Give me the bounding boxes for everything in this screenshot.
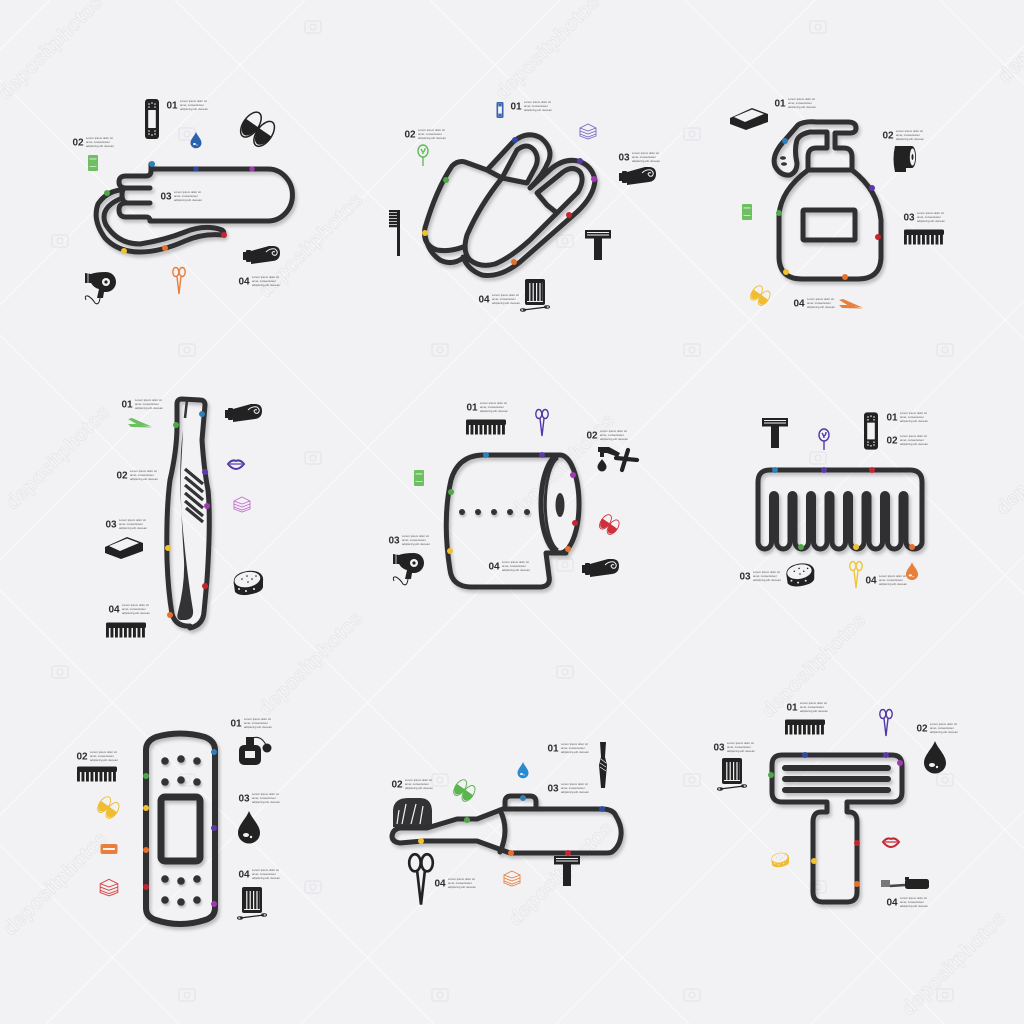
watermarks: depositphotos bbox=[897, 907, 1010, 1020]
label 04: Lorem ipsum dolor sit bbox=[502, 560, 529, 564]
label 01: adipiscing elit. Aenean bbox=[800, 709, 828, 713]
label 01: amet, consectetuer bbox=[900, 415, 924, 419]
icon: slippers bbox=[597, 513, 621, 537]
icon: scissors bbox=[850, 562, 862, 588]
road: dispenser outline bbox=[774, 122, 881, 279]
label 04: adipiscing elit. Aenean bbox=[807, 305, 835, 309]
label 02: 02 bbox=[72, 138, 84, 148]
label 04: 04 bbox=[238, 870, 250, 880]
label 01: Lorem ipsum dolor sit bbox=[180, 99, 207, 103]
label 02: 02 bbox=[392, 780, 403, 790]
label 02: adipiscing elit. Aenean bbox=[405, 786, 433, 790]
label 03 bbox=[548, 782, 589, 794]
icon: scissors bbox=[409, 854, 433, 905]
label 02: 02 bbox=[886, 436, 898, 446]
road: tweezers outline bbox=[167, 399, 209, 628]
icon: lips bbox=[883, 838, 899, 847]
label 02: 02 bbox=[404, 130, 416, 140]
road: slippers outline bbox=[424, 135, 595, 275]
icon: water drop bbox=[518, 762, 528, 778]
label 04: 04 bbox=[108, 604, 120, 616]
label 01: 01 bbox=[774, 98, 786, 110]
label 03: Lorem ipsum dolor sit bbox=[632, 151, 659, 155]
road: bandage outline bbox=[146, 734, 215, 924]
label 01: Lorem ipsum dolor sit bbox=[900, 411, 927, 415]
label 01 bbox=[774, 97, 816, 110]
label 01: 01 bbox=[886, 412, 898, 424]
label 02 bbox=[882, 129, 924, 142]
label 03: amet, consectetuer bbox=[174, 194, 198, 198]
perforation dots bbox=[459, 509, 530, 515]
label 01: amet, consectetuer bbox=[135, 402, 159, 406]
label 04: Lorem ipsum dolor sit bbox=[807, 297, 834, 301]
icon: towels bbox=[504, 871, 520, 886]
inner ring of roll bbox=[545, 458, 558, 550]
icon: straight razor bbox=[839, 299, 863, 308]
label 01: Lorem ipsum dolor sit bbox=[524, 100, 551, 104]
label 03: amet, consectetuer bbox=[119, 522, 143, 526]
grip stripes bbox=[185, 469, 203, 522]
label 03: adipiscing elit. Aenean bbox=[561, 790, 589, 794]
icon: slippers bbox=[95, 794, 122, 821]
icon: faucet bbox=[598, 447, 637, 472]
label 03: 03 bbox=[106, 520, 117, 530]
label 01: amet, consectetuer bbox=[524, 104, 548, 108]
label 04: Lorem ipsum dolor sit bbox=[492, 293, 519, 297]
label 04: amet, consectetuer bbox=[492, 297, 516, 301]
label 01: 01 bbox=[122, 400, 133, 410]
panel: toilet roll road infographic bbox=[388, 401, 637, 587]
label 04 bbox=[478, 293, 520, 306]
label 04: Lorem ipsum dolor sit bbox=[252, 868, 279, 872]
panel: electric toothbrush road infographic bbox=[392, 742, 621, 905]
label 01: 01 bbox=[166, 100, 178, 112]
icon: scissors bbox=[173, 268, 185, 294]
label 03: adipiscing elit. Aenean bbox=[917, 219, 945, 223]
label 01: Lorem ipsum dolor sit bbox=[561, 742, 588, 746]
icon: comb bbox=[77, 766, 117, 776]
label 02 bbox=[116, 469, 158, 482]
label 03: adipiscing elit. Aenean bbox=[727, 749, 755, 753]
label 03: adipiscing elit. Aenean bbox=[632, 159, 660, 163]
label 04: amet, consectetuer bbox=[122, 607, 146, 611]
icon: bottle bbox=[88, 155, 98, 171]
label 03: Lorem ipsum dolor sit bbox=[174, 190, 201, 194]
watermarks: depositphotos bbox=[506, 409, 619, 522]
label 01: Lorem ipsum dolor sit bbox=[800, 701, 827, 705]
label 01 bbox=[786, 701, 828, 714]
road: razor outline bbox=[772, 755, 902, 902]
route dots bbox=[143, 749, 217, 907]
icon: towels bbox=[100, 879, 118, 896]
label 02: amet, consectetuer bbox=[896, 133, 920, 137]
label 01 bbox=[166, 99, 208, 112]
label 03: amet, consectetuer bbox=[917, 215, 941, 219]
label 03: adipiscing elit. Aenean bbox=[402, 542, 430, 546]
label 04: Lorem ipsum dolor sit bbox=[900, 896, 927, 900]
label 02: adipiscing elit. Aenean bbox=[86, 144, 114, 148]
label 02 bbox=[392, 778, 433, 790]
panel: bandage road infographic bbox=[76, 717, 280, 924]
icon: soap bar bbox=[105, 537, 143, 559]
icon: tweezers bbox=[599, 742, 607, 788]
route dots bbox=[772, 467, 915, 550]
label 04: adipiscing elit. Aenean bbox=[252, 876, 280, 880]
label 02: amet, consectetuer bbox=[405, 782, 429, 786]
label 02 bbox=[404, 128, 446, 140]
icon: soap bar bbox=[730, 108, 768, 130]
bristle slits bbox=[397, 804, 423, 824]
label 03 bbox=[904, 211, 945, 224]
icon: straight razor bbox=[128, 418, 152, 428]
label 04: amet, consectetuer bbox=[252, 279, 276, 283]
icon: tube bbox=[243, 246, 280, 264]
icon: scissors bbox=[536, 410, 548, 436]
label 01: amet, consectetuer bbox=[561, 746, 585, 750]
label 01: adipiscing elit. Aenean bbox=[524, 108, 552, 112]
label 03: 03 bbox=[160, 192, 172, 202]
label 04: amet, consectetuer bbox=[900, 900, 924, 904]
icon: bandage bbox=[496, 102, 504, 118]
label 04 bbox=[238, 868, 280, 880]
icon: water drop bbox=[190, 132, 202, 148]
label 02: 02 bbox=[116, 470, 128, 482]
label 04 bbox=[866, 574, 907, 586]
label 03: 03 bbox=[740, 572, 751, 582]
label 04: adipiscing elit. Aenean bbox=[122, 611, 150, 615]
icon: comb bbox=[904, 230, 944, 240]
icon: toilet roll bbox=[894, 146, 916, 172]
label 02: adipiscing elit. Aenean bbox=[600, 437, 628, 441]
route dots bbox=[104, 161, 255, 254]
label 04: adipiscing elit. Aenean bbox=[448, 885, 476, 889]
label 02: adipiscing elit. Aenean bbox=[130, 477, 158, 481]
label 04: adipiscing elit. Aenean bbox=[502, 568, 530, 572]
tweezers inner blade bbox=[177, 430, 193, 620]
label 01: 01 bbox=[548, 744, 559, 754]
label 02: Lorem ipsum dolor sit bbox=[930, 722, 957, 726]
label 04: Lorem ipsum dolor sit bbox=[252, 275, 279, 279]
label 03: Lorem ipsum dolor sit bbox=[727, 741, 754, 745]
label 02: amet, consectetuer bbox=[900, 438, 924, 442]
label 02: amet, consectetuer bbox=[86, 140, 110, 144]
label 02 bbox=[886, 434, 928, 446]
label 03 bbox=[618, 151, 660, 164]
icon: sponge bbox=[786, 563, 814, 587]
icon: bottle bbox=[414, 470, 424, 486]
road: toothbrush outline bbox=[392, 796, 621, 853]
label 03: amet, consectetuer bbox=[727, 745, 751, 749]
label 01: Lorem ipsum dolor sit bbox=[480, 401, 507, 405]
icon: toothbrush bbox=[393, 210, 400, 256]
label 02: Lorem ipsum dolor sit bbox=[600, 429, 627, 433]
icon: slippers bbox=[237, 109, 279, 150]
label 02: amet, consectetuer bbox=[130, 473, 154, 477]
icon: drop bbox=[924, 741, 946, 774]
label 03: adipiscing elit. Aenean bbox=[174, 198, 202, 202]
label 03: 03 bbox=[238, 794, 250, 804]
label 01 bbox=[466, 401, 508, 414]
label 03: adipiscing elit. Aenean bbox=[252, 800, 280, 804]
label 02: Lorem ipsum dolor sit bbox=[418, 128, 445, 132]
label 04 bbox=[434, 877, 476, 890]
label 01: amet, consectetuer bbox=[480, 405, 504, 409]
label 01: Lorem ipsum dolor sit bbox=[244, 717, 271, 721]
label 02: adipiscing elit. Aenean bbox=[418, 136, 446, 140]
label 03: amet, consectetuer bbox=[753, 574, 777, 578]
watermarks: depositphotos bbox=[254, 607, 367, 720]
label 04: 04 bbox=[794, 298, 805, 310]
label 02 bbox=[72, 136, 114, 148]
label 04: 04 bbox=[488, 562, 500, 572]
label 03 bbox=[388, 534, 430, 546]
label 01: 01 bbox=[510, 102, 522, 112]
label 03: amet, consectetuer bbox=[402, 538, 426, 542]
label 02: 02 bbox=[916, 724, 928, 734]
label 04 bbox=[488, 560, 530, 572]
label 04: amet, consectetuer bbox=[448, 881, 472, 885]
label 03 bbox=[238, 792, 280, 804]
label 03: 03 bbox=[618, 152, 630, 164]
label 02: Lorem ipsum dolor sit bbox=[896, 129, 923, 133]
tweezers tip slit bbox=[185, 400, 187, 418]
label 03: Lorem ipsum dolor sit bbox=[252, 792, 279, 796]
watermarks: depositphotos bbox=[504, 817, 617, 930]
icon: bottle bbox=[742, 204, 752, 220]
label 04 bbox=[108, 603, 150, 616]
label 03 bbox=[160, 190, 202, 202]
label 01: 01 bbox=[466, 402, 478, 414]
label 01: adipiscing elit. Aenean bbox=[244, 725, 272, 729]
label 01: Lorem ipsum dolor sit bbox=[788, 97, 815, 101]
label 01: adipiscing elit. Aenean bbox=[788, 105, 816, 109]
label 04: 04 bbox=[886, 898, 898, 908]
label 01 bbox=[886, 411, 928, 424]
label 04: adipiscing elit. Aenean bbox=[879, 582, 907, 586]
panel: soap dispenser road infographic bbox=[730, 97, 945, 310]
label 04: Lorem ipsum dolor sit bbox=[879, 574, 906, 578]
icon: mirror bbox=[819, 429, 829, 450]
icon: bandage bbox=[145, 99, 159, 139]
icon: razor bbox=[762, 418, 788, 448]
label 01: Lorem ipsum dolor sit bbox=[135, 398, 162, 402]
icon: slippers bbox=[451, 777, 478, 804]
label 04: adipiscing elit. Aenean bbox=[900, 904, 928, 908]
label 04 bbox=[794, 297, 835, 310]
watermarks: depositphotos bbox=[1, 401, 114, 514]
label 03: Lorem ipsum dolor sit bbox=[753, 570, 780, 574]
route dots bbox=[422, 137, 597, 265]
label 03: amet, consectetuer bbox=[252, 796, 276, 800]
label 01 bbox=[510, 100, 552, 112]
label 03: 03 bbox=[548, 784, 559, 794]
icon: bin with cotton swab bbox=[520, 279, 550, 311]
label 03 bbox=[740, 570, 781, 582]
label 02: amet, consectetuer bbox=[930, 726, 954, 730]
label 01 bbox=[548, 742, 589, 754]
label 04: adipiscing elit. Aenean bbox=[492, 301, 520, 305]
label 02 bbox=[916, 722, 958, 734]
icon: hair dryer bbox=[393, 553, 424, 585]
label 03: adipiscing elit. Aenean bbox=[119, 526, 147, 530]
label 01: adipiscing elit. Aenean bbox=[180, 107, 208, 111]
route dots bbox=[418, 795, 605, 856]
bandage holes bbox=[161, 755, 201, 906]
icon: sponge bbox=[771, 852, 789, 867]
icon: electric toothbrush bbox=[881, 877, 929, 889]
icon: water drop bbox=[906, 562, 918, 580]
label 02: Lorem ipsum dolor sit bbox=[130, 469, 157, 473]
label 01: 01 bbox=[786, 702, 798, 714]
icon: comb bbox=[106, 622, 146, 632]
label 04 bbox=[238, 275, 280, 288]
label 01: 01 bbox=[230, 718, 242, 730]
label 03 bbox=[714, 741, 755, 754]
watermarks: depositphotos bbox=[254, 189, 367, 302]
label 01: adipiscing elit. Aenean bbox=[480, 409, 508, 413]
label 04 bbox=[886, 896, 928, 908]
road: hand outline bbox=[96, 164, 292, 252]
label 04: Lorem ipsum dolor sit bbox=[122, 603, 149, 607]
label 01: adipiscing elit. Aenean bbox=[900, 419, 928, 423]
label 02: adipiscing elit. Aenean bbox=[896, 137, 924, 141]
label 02: amet, consectetuer bbox=[90, 754, 114, 758]
label 04: 04 bbox=[478, 294, 490, 306]
route dots bbox=[776, 138, 881, 280]
icon: drop bbox=[238, 811, 260, 844]
icon: comb bbox=[466, 420, 506, 430]
label 03: Lorem ipsum dolor sit bbox=[917, 211, 944, 215]
label 01 bbox=[230, 717, 272, 730]
label 01: amet, consectetuer bbox=[788, 101, 812, 105]
label 04: 04 bbox=[434, 878, 446, 890]
label 01: adipiscing elit. Aenean bbox=[561, 750, 589, 754]
toothbrush bristles bbox=[393, 798, 432, 827]
label 03: 03 bbox=[714, 742, 725, 754]
icon: bin with cotton swab bbox=[718, 758, 746, 790]
label 02: 02 bbox=[882, 130, 894, 142]
label 03: Lorem ipsum dolor sit bbox=[561, 782, 588, 786]
icon: tube bbox=[225, 404, 262, 422]
icon: perfume bbox=[239, 737, 272, 765]
icon: razor bbox=[585, 230, 611, 260]
panel: hand road infographic bbox=[72, 99, 292, 304]
label 04: 04 bbox=[238, 276, 250, 288]
label 02 bbox=[586, 429, 628, 442]
label 02: Lorem ipsum dolor sit bbox=[86, 136, 113, 140]
label 02: 02 bbox=[586, 430, 598, 442]
label 02: adipiscing elit. Aenean bbox=[930, 730, 958, 734]
label 02: Lorem ipsum dolor sit bbox=[900, 434, 927, 438]
label 02: 02 bbox=[76, 752, 88, 762]
icon: sponge bbox=[233, 570, 263, 595]
label 03: Lorem ipsum dolor sit bbox=[402, 534, 429, 538]
label 02 bbox=[76, 750, 118, 762]
icon: bin with cotton swab bbox=[238, 887, 266, 919]
road: toilet roll outline bbox=[446, 455, 579, 587]
label 04: amet, consectetuer bbox=[252, 872, 276, 876]
panel: tweezers road infographic bbox=[105, 398, 263, 632]
icon: bandage bbox=[864, 412, 878, 450]
label 03: amet, consectetuer bbox=[632, 155, 656, 159]
icon: towels bbox=[234, 497, 250, 512]
label 03: 03 bbox=[388, 536, 400, 546]
label 02: adipiscing elit. Aenean bbox=[900, 442, 928, 446]
route dots bbox=[768, 752, 903, 887]
icon: comb bbox=[785, 720, 825, 730]
watermarks: depositphotos bbox=[0, 827, 112, 940]
road: comb outline bbox=[758, 470, 922, 549]
label 03: 03 bbox=[904, 212, 915, 224]
route dots bbox=[447, 452, 578, 554]
label 04: amet, consectetuer bbox=[502, 564, 526, 568]
roll core bbox=[556, 493, 564, 517]
watermarks: depositphotos bbox=[757, 609, 870, 722]
route dots bbox=[165, 411, 210, 618]
label 01: amet, consectetuer bbox=[244, 721, 268, 725]
label 03 bbox=[106, 518, 147, 530]
label 04: amet, consectetuer bbox=[807, 301, 831, 305]
label 02: adipiscing elit. Aenean bbox=[90, 758, 118, 762]
icon: mirror bbox=[418, 145, 428, 166]
icon: towels bbox=[580, 124, 596, 139]
panel: comb road infographic bbox=[740, 411, 928, 588]
label 01 bbox=[122, 398, 163, 410]
label 02: amet, consectetuer bbox=[418, 132, 442, 136]
label 03: Lorem ipsum dolor sit bbox=[119, 518, 146, 522]
label 02: Lorem ipsum dolor sit bbox=[90, 750, 117, 754]
icon: lips bbox=[228, 460, 244, 469]
icon: scissors bbox=[880, 710, 892, 736]
label 04: 04 bbox=[866, 576, 877, 586]
label 01: adipiscing elit. Aenean bbox=[135, 406, 163, 410]
panel: razor road infographic bbox=[714, 701, 958, 908]
drop detail bbox=[780, 156, 787, 166]
label 04: adipiscing elit. Aenean bbox=[252, 283, 280, 287]
icon: slippers bbox=[748, 284, 772, 308]
icon: blade bbox=[100, 844, 118, 854]
label 02: Lorem ipsum dolor sit bbox=[405, 778, 432, 782]
label 01: amet, consectetuer bbox=[800, 705, 824, 709]
label 02: amet, consectetuer bbox=[600, 433, 624, 437]
label 03: adipiscing elit. Aenean bbox=[753, 578, 781, 582]
label 03: amet, consectetuer bbox=[561, 786, 585, 790]
panel: slippers road infographic bbox=[393, 100, 660, 311]
label 04: amet, consectetuer bbox=[879, 578, 903, 582]
icon: hair dryer bbox=[85, 272, 116, 304]
icon: tube bbox=[582, 559, 619, 577]
icon: razor bbox=[554, 856, 580, 886]
label 01: amet, consectetuer bbox=[180, 103, 204, 107]
icon: tube bbox=[619, 167, 656, 185]
label 04: Lorem ipsum dolor sit bbox=[448, 877, 475, 881]
